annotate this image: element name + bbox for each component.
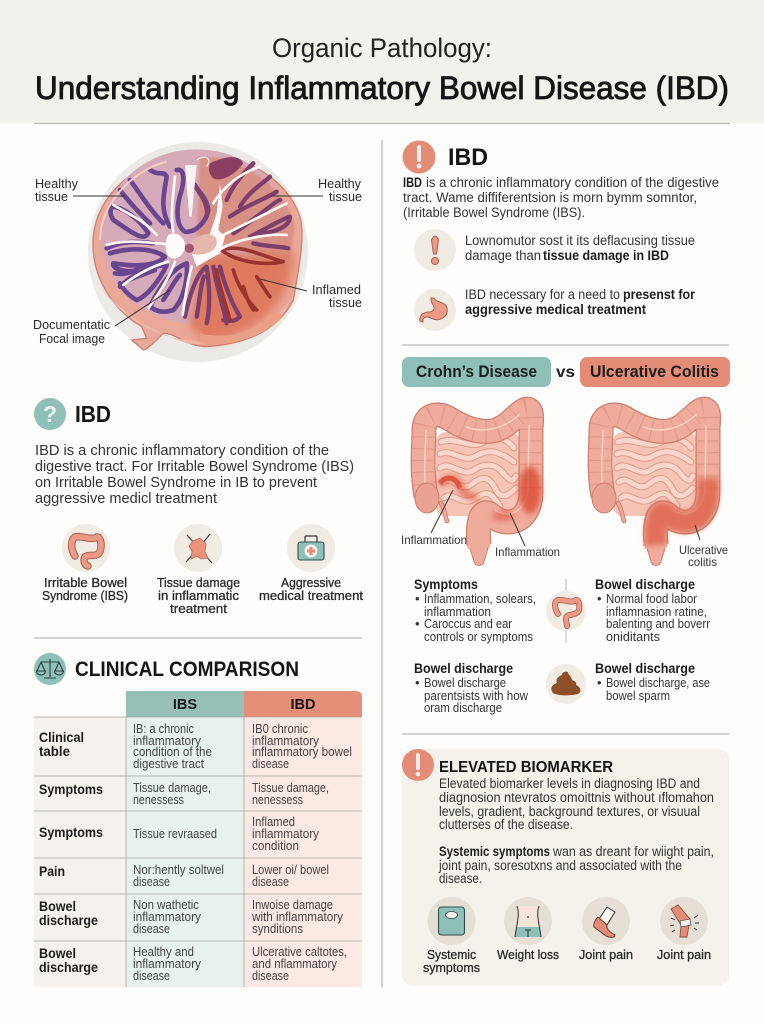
row: pain: Nor:hently soltwel <box>133 863 224 877</box>
item: treatment note: aggressive medical treatment <box>465 302 646 317</box>
pill: Crohn's Disease <box>402 357 551 387</box>
row: pain: disease <box>133 875 170 889</box>
section heading: IBD question: IBD <box>75 401 111 427</box>
block: bowel discharge lower right: • <box>597 675 602 690</box>
item: aggressive treatment <box>259 524 364 603</box>
row: pain: Lower oi/ bowel <box>252 863 329 877</box>
row: clinical table: disease <box>252 757 289 771</box>
main title: Understanding Inflammatory Bowel Disease (IBD) <box>35 70 729 106</box>
row: clinical table: condition of the <box>133 745 212 759</box>
text block: IBD summary: is a chronic inflammatory condition of the digestive <box>426 175 719 190</box>
icon: alert circle <box>402 749 434 781</box>
item: irritable bowel syndrome: Irritable Bowel <box>44 576 127 590</box>
row: bowel discharge 2: inflammatory <box>133 957 202 971</box>
block: bowel discharge lower left: parentsists with how <box>424 688 529 703</box>
table header: IBS: IBS <box>173 697 197 713</box>
section heading: clinical comparison <box>34 653 299 685</box>
icon: alert circle <box>402 140 436 174</box>
row: bowel discharge 2: disease <box>133 969 170 983</box>
block: bowel discharge upper right <box>595 576 711 644</box>
label: healthy tissue right <box>271 177 362 204</box>
row: clinical table: inflammatory <box>252 734 320 748</box>
row: bowel discharge 2 <box>39 945 347 983</box>
item: treatment note: IBD necessary for a need to <box>465 287 620 302</box>
table: IBS vs IBD <box>34 691 362 987</box>
item: tissue damage note: tissue damage in IBD <box>543 248 669 263</box>
item: joint pain foot <box>579 897 633 962</box>
row: symptoms 1: nenessess <box>133 793 184 807</box>
icon: damaged tissue <box>174 524 222 572</box>
block: bowel discharge lower left: Bowel discharge <box>414 660 513 676</box>
table header: IBD: IBD <box>291 697 315 713</box>
title line 1: Organic Pathology: <box>272 33 492 63</box>
row: symptoms 1: Symptoms <box>39 781 103 797</box>
histology cross-section image with labels <box>33 142 362 362</box>
icon: weighing scale <box>428 897 476 945</box>
row: clinical table: inflammatory <box>133 734 202 748</box>
lumen and white clefts <box>107 167 287 315</box>
table header: IBD <box>244 691 362 717</box>
row: bowel discharge 2: Healthy and <box>133 945 194 959</box>
row: symptoms 2: condition <box>252 839 299 853</box>
icon: waist <box>504 897 552 945</box>
row: clinical table: table <box>39 743 70 759</box>
icon: shoe <box>582 897 630 945</box>
row: bowel discharge 1: synditions <box>252 922 303 936</box>
item: tissue damage <box>157 524 240 616</box>
row: bowel discharge 2: and nflammatory <box>252 957 338 971</box>
label: inflammation right: Inflammation <box>495 545 560 559</box>
block: bowel discharge upper right: • <box>597 591 602 606</box>
vs label: vs <box>556 364 575 381</box>
label: documentatic focal image: Focal image <box>39 332 105 346</box>
text block: systemic symptoms <box>438 844 714 886</box>
label: ulcerative colitis: Ulcerative <box>679 543 728 557</box>
row: symptoms 2: inflammatory <box>252 827 320 841</box>
item: tissue damage note: damage than <box>465 248 541 263</box>
text block: systemic symptoms: Systemic symptoms <box>439 844 550 859</box>
text block: systemic symptoms: disease. <box>439 871 482 886</box>
dark fold top right <box>209 157 243 179</box>
icon: knee <box>660 897 708 945</box>
block: bowel discharge lower right: Bowel discharge, ase <box>606 675 710 690</box>
item: tissue damage note <box>414 229 695 271</box>
row: clinical table: IB0 chronic <box>252 722 308 736</box>
icon: colon <box>62 524 110 572</box>
row: symptoms 2: Symptoms <box>39 824 103 840</box>
item: weight loss: Weight loss <box>497 948 559 962</box>
text block: IBD definition: digestive tract. For Irritable Bowel Syndrome (IBS) <box>35 458 354 475</box>
icon: small colon <box>546 579 586 643</box>
text block: IBD summary: tract. Wame diffiferentsion is morn bymm somntor, <box>403 190 697 205</box>
row: pain: Pain <box>39 863 65 879</box>
icon: question mark: ? <box>43 401 57 427</box>
block: symptoms left: Caroccus and ear <box>424 616 513 631</box>
item: tissue damage: treatment <box>170 602 228 616</box>
pill: Ulcerative Colitis: Ulcerative Colitis <box>590 363 719 381</box>
item: treatment note: presenst for <box>623 287 696 302</box>
block: bowel discharge upper right: oniditants <box>606 629 660 644</box>
item: systemic symptoms: symptoms <box>423 961 480 975</box>
item: treatment note <box>414 287 696 331</box>
block: symptoms left: • <box>415 616 420 631</box>
section heading: clinical comparison: CLINICAL COMPARISON <box>75 658 299 681</box>
row: clinical table: inflammatory bowel <box>252 745 352 759</box>
item: systemic symptoms: Systemic <box>427 948 476 962</box>
row: bowel discharge 1: Inwoise damage <box>252 898 333 912</box>
label: healthy tissue right: tissue <box>329 190 362 204</box>
row: symptoms 1: nenessess <box>252 793 303 807</box>
diagram: Crohn's colon <box>401 409 560 566</box>
row: symptoms 2 <box>39 815 320 853</box>
block: bowel discharge lower left: Bowel discharge <box>424 675 506 690</box>
block: bowel discharge lower left <box>414 660 529 715</box>
diagram: ulcerative colitis colon <box>592 409 728 569</box>
text block: systemic symptoms: wan as dreant for wiight pain, <box>552 844 714 859</box>
row: clinical table: IB: a chronic <box>133 722 194 736</box>
text block: IBD definition: on Irritable Bowel Syndrome in IB to prevent <box>35 474 318 491</box>
row: clinical table: digestive tract <box>133 757 204 771</box>
label: ulcerative colitis: colitis <box>688 555 717 569</box>
icon: stool <box>546 664 586 704</box>
row: bowel discharge 2: Bowel <box>39 945 76 961</box>
label: documentatic focal image: Documentatic <box>33 318 110 332</box>
block: symptoms left: controls or symptoms <box>424 629 533 644</box>
text block: IBD definition: IBD is a chronic inflammatory condition of the <box>35 442 329 459</box>
text block: IBD summary: (Irritable Bowel Syndrome (IBS). <box>403 205 585 220</box>
item: systemic symptoms <box>423 897 480 975</box>
block: bowel discharge upper right: Bowel discharge <box>595 576 695 592</box>
item: joint pain foot: Joint pain <box>579 948 633 962</box>
block: bowel discharge lower right: bowel sparm <box>606 688 670 703</box>
row: clinical table <box>39 722 352 771</box>
block: bowel discharge upper right: Normal food labor <box>606 591 698 606</box>
row: bowel discharge 2: disease <box>252 969 289 983</box>
block: symptoms left: inflammation <box>424 604 491 619</box>
row: symptoms 1: Tissue damage, <box>133 781 211 795</box>
row: bowel discharge 1: Non wathetic <box>133 898 199 912</box>
label: documentatic focal image <box>33 290 170 346</box>
header band <box>0 0 764 123</box>
label: inflamed tissue <box>260 279 362 310</box>
label: healthy tissue left: Healthy <box>35 177 79 191</box>
block: bowel discharge lower right: Bowel discharge <box>595 660 695 676</box>
text block: systemic symptoms: joint pain, soresotxns and associated with the <box>438 858 682 873</box>
item: irritable bowel syndrome: Syndrome (IBS) <box>42 589 128 603</box>
row: bowel discharge 1: inflammatory <box>133 910 202 924</box>
block: symptoms left <box>414 576 536 644</box>
block: symptoms left: • <box>415 591 420 606</box>
table header: IBS <box>126 691 244 717</box>
row: bowel discharge 1: disease <box>133 922 170 936</box>
item: tissue damage: in inflammatic <box>158 589 239 603</box>
row: bowel discharge 1: Bowel <box>39 898 76 914</box>
icon: exclamation <box>414 229 456 271</box>
row: symptoms 2: Inflamed <box>252 815 295 829</box>
item: joint pain knee: Joint pain <box>657 948 711 962</box>
text block: biomarker levels <box>439 776 714 832</box>
item: aggressive treatment: Aggressive <box>281 576 341 590</box>
block: bowel discharge lower right <box>595 660 710 703</box>
text block: biomarker levels: Elevated biomarker levels in diagnosing IBD and <box>439 776 700 791</box>
pill: Crohn's Disease: Crohn’s Disease <box>416 363 537 381</box>
panel heading: ELEVATED BIOMARKER <box>439 759 613 776</box>
label: inflammation left <box>401 490 467 547</box>
block: bowel discharge lower left: • <box>415 675 420 690</box>
section heading: IBD alert <box>402 140 488 174</box>
item: tissue damage: Tissue damage <box>157 576 240 590</box>
row: symptoms 2: Tissue revraased <box>133 827 217 841</box>
pill: Ulcerative Colitis <box>580 357 730 387</box>
icon: balance scales <box>34 653 66 685</box>
panel: elevated biomarker <box>402 749 729 986</box>
row: symptoms 1 <box>39 781 329 807</box>
icon: stomach <box>414 289 456 331</box>
row: bowel discharge 2: Ulcerative caltotes, <box>252 945 347 959</box>
item: irritable bowel syndrome <box>42 524 128 603</box>
section heading: IBD question <box>34 398 111 430</box>
text block: biomarker levels: clutterses of the disease. <box>439 817 573 832</box>
icon: first aid kit <box>287 524 335 572</box>
label: healthy tissue right: Healthy <box>318 177 362 191</box>
label: healthy tissue left <box>35 177 125 204</box>
label: inflammation left: Inflammation <box>401 533 467 547</box>
text block: IBD definition <box>35 442 354 507</box>
row: bowel discharge 1: discharge <box>39 912 98 928</box>
item: weight loss <box>497 897 559 962</box>
text block: IBD definition: aggressive medicl treatment <box>35 490 218 507</box>
item: tissue damage note: Lownomutor sost it its deflacusing tissue <box>465 233 695 248</box>
row: pain <box>39 863 329 889</box>
item: aggressive treatment: medical treatment <box>259 589 364 603</box>
mucosal folds <box>107 170 208 312</box>
block: bowel discharge upper right: balenting and boverr <box>606 616 711 631</box>
block: bowel discharge lower left: oram discharge <box>424 700 502 715</box>
row: pain: disease <box>252 875 289 889</box>
text block: IBD summary <box>403 175 719 220</box>
row: symptoms 1: Tissue damage, <box>252 781 329 795</box>
tissue section <box>93 149 302 350</box>
row: clinical table: Clinical <box>39 729 84 745</box>
section heading: IBD alert: IBD <box>448 144 488 171</box>
label: inflamed tissue: Inflamed <box>312 283 361 297</box>
item: joint pain knee <box>657 897 711 962</box>
label: healthy tissue left: tissue <box>35 190 68 204</box>
block: bowel discharge upper right: inflamnasion ratine, <box>606 604 707 619</box>
label: inflammation right <box>495 513 560 559</box>
text block: IBD summary: IBD <box>403 175 422 190</box>
label: ulcerative colitis <box>679 525 728 569</box>
block: symptoms left: Symptoms <box>414 576 478 592</box>
row: bowel discharge 2: discharge <box>39 959 98 975</box>
text block: biomarker levels: levels, gradient, background textures, or visuual <box>439 804 700 819</box>
row: bowel discharge 1 <box>39 898 344 936</box>
block: symptoms left: Inflammation, solears, <box>424 591 536 606</box>
label: inflamed tissue: tissue <box>329 296 362 310</box>
text block: biomarker levels: diagnosion ntevratos omoittnis without ıflomahon <box>439 790 714 805</box>
row: bowel discharge 1: with inflammatory <box>251 910 344 924</box>
